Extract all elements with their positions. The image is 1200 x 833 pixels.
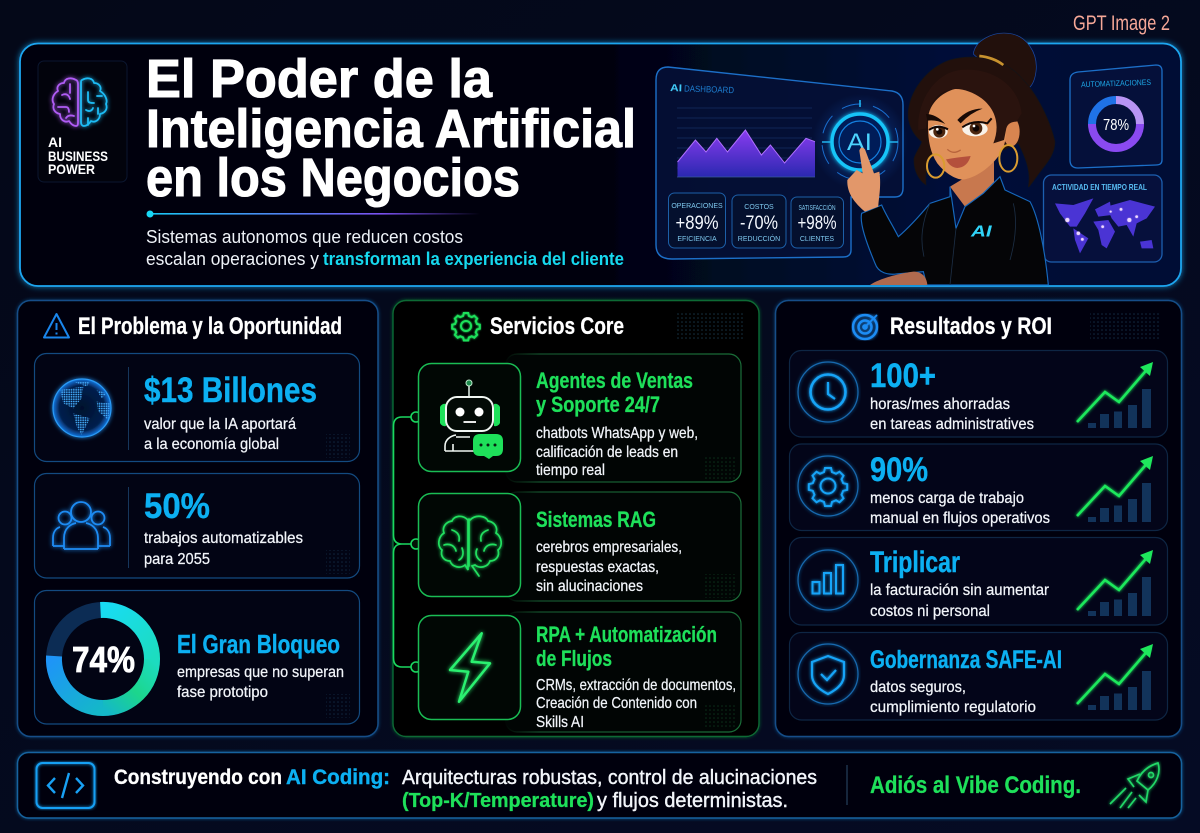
chart: growth arrow xyxy=(1077,362,1153,428)
text: Sistemas RAG xyxy=(536,507,656,532)
face xyxy=(928,88,1006,180)
donut 78% xyxy=(1092,100,1140,148)
text: Agentes de Ventas xyxy=(536,368,693,393)
text: a la economía global xyxy=(144,436,279,453)
text: cerebros empresariales, xyxy=(536,539,682,556)
jacket logo: AI xyxy=(970,224,992,241)
subtitle: escalan operaciones y xyxy=(146,249,319,269)
closing statement: Adiós al Vibe Coding. xyxy=(870,772,1081,799)
dashboard heading: DASHBOARD xyxy=(684,83,735,95)
text xyxy=(870,357,1034,433)
icon: people xyxy=(53,502,110,549)
icon: brain xyxy=(439,516,501,576)
dashboard heading xyxy=(670,83,735,96)
stat: costos: COSTOS xyxy=(744,204,774,211)
icon: AI circle: AI xyxy=(847,129,872,156)
text xyxy=(536,368,698,479)
dashboard: automatizaciones: 78% xyxy=(1103,117,1129,134)
jacket zip and seams xyxy=(922,203,1016,285)
text: empresas que no superan xyxy=(177,664,344,681)
text: manual en flujos operativos xyxy=(870,510,1050,527)
stat: costos: REDUCCIÓN xyxy=(738,234,780,243)
panel: header xyxy=(20,33,1181,286)
dashboard: actividad en tiempo real xyxy=(1044,175,1162,262)
icon: lightning bolt xyxy=(450,633,490,702)
text: la facturación sin aumentar xyxy=(870,582,1050,599)
card: 50% xyxy=(34,474,360,578)
footer heading: AI Coding: xyxy=(286,766,390,789)
panel: resultados y ROI xyxy=(776,300,1182,736)
text: fase prototipo xyxy=(177,684,268,701)
title: en los Negocios xyxy=(146,148,520,208)
text: cumplimiento regulatorio xyxy=(870,699,1036,716)
icon: warning xyxy=(44,314,69,338)
title: El Poder de la xyxy=(146,49,493,109)
earrings xyxy=(927,145,1017,178)
icon: AI circle xyxy=(812,94,908,190)
text: de Flujos xyxy=(536,646,612,671)
text: Triplicar xyxy=(870,546,960,579)
text: costos ni personal xyxy=(870,603,990,620)
panel: servicios core xyxy=(393,300,759,736)
panel: el problema y la oportunidad xyxy=(18,300,378,736)
text xyxy=(144,371,317,453)
hair tie xyxy=(979,56,1003,65)
stat: operaciones xyxy=(668,193,726,248)
world map xyxy=(1055,198,1155,253)
icon: gear xyxy=(798,456,858,516)
title underline xyxy=(146,210,480,218)
icon: robot xyxy=(440,380,503,459)
text: menos carga de trabajo xyxy=(870,490,1024,507)
jacket xyxy=(861,177,1048,285)
text: 90% xyxy=(870,451,928,489)
logo: AI Business Power xyxy=(38,61,127,182)
donut chart: 74% xyxy=(54,610,152,708)
stat: costos xyxy=(732,195,786,248)
text: chatbots WhatsApp y web, xyxy=(536,425,698,442)
dashboard: automatizaciones xyxy=(1070,65,1162,168)
text: en tareas administratives xyxy=(870,416,1034,433)
footer banner xyxy=(18,752,1182,818)
footer heading: Construyendo con xyxy=(114,766,282,789)
text: RPA + Automatización xyxy=(536,622,717,647)
text: 50% xyxy=(144,487,210,526)
text: para 2055 xyxy=(144,551,210,568)
dashboard heading: AI xyxy=(670,83,683,94)
subtitle: Sistemas autonomos que reducen costos xyxy=(146,227,463,247)
text: sin alucinaciones xyxy=(536,578,643,595)
hair: bun xyxy=(973,33,1036,91)
text xyxy=(870,451,1050,527)
icon: gear xyxy=(452,313,480,340)
footer description: (Top-K/Temperature) xyxy=(402,790,594,812)
title: Inteligencia Artificial xyxy=(146,99,636,159)
stat: satisfacción: SATISFACCIÓN xyxy=(798,203,836,212)
text: El Gran Bloqueo xyxy=(177,629,340,659)
footer description: Arquitecturas robustas, control de alucinaciones xyxy=(402,767,817,789)
card: sistemas RAG xyxy=(418,492,741,601)
icon: code xyxy=(36,763,94,808)
text: horas/mes ahorradas xyxy=(870,396,1010,413)
card: triplicar xyxy=(790,538,1168,625)
text: Creación de Contenido con xyxy=(536,695,697,712)
footer heading xyxy=(114,766,390,789)
chart: growth arrow xyxy=(1077,456,1153,522)
footer description xyxy=(402,767,817,812)
text xyxy=(870,546,1050,620)
icon: shield xyxy=(798,644,858,704)
stat: operaciones: +89% xyxy=(676,213,719,234)
dashboard: main screen xyxy=(656,67,903,259)
footer description: y flujos deterministas. xyxy=(597,790,788,812)
text: trabajos automatizables xyxy=(144,530,303,547)
text xyxy=(536,622,736,731)
dashboard: automatizaciones: AUTOMATIZACIONES xyxy=(1081,78,1151,89)
text: datos seguros, xyxy=(870,679,966,696)
card: agentes de ventas xyxy=(418,354,741,482)
title xyxy=(146,49,636,208)
text: tiempo real xyxy=(536,462,605,479)
logo text: AI xyxy=(48,134,62,150)
text: respuestas exactas, xyxy=(536,559,659,576)
ear xyxy=(1003,117,1020,146)
hand on desk xyxy=(870,272,927,285)
subtitle: transforman la experiencia del cliente xyxy=(323,249,624,269)
card: 90% xyxy=(790,444,1168,530)
chart: growth arrow xyxy=(1077,550,1153,616)
text: $13 Billones xyxy=(144,371,317,410)
icon: bars xyxy=(798,550,858,610)
logo text: BUSINESS xyxy=(48,148,108,164)
card: 74% xyxy=(34,590,360,724)
chart: growth arrow xyxy=(1077,644,1153,710)
watermark: GPT Image 2: GPT Image 2 xyxy=(1073,12,1170,35)
hair: fringe xyxy=(918,70,1022,143)
text: Gobernanza SAFE-AI xyxy=(870,646,1062,674)
stat: operaciones: OPERACIONES xyxy=(671,203,723,210)
hair: back and ponytail xyxy=(908,57,1055,187)
text: valor que la IA aportará xyxy=(144,416,296,433)
icon: rocket xyxy=(1110,763,1159,808)
illustration: woman with AI jacket xyxy=(847,33,1055,285)
stat: operaciones: EFICIENCIA xyxy=(677,236,717,243)
text xyxy=(870,646,1062,716)
heading: El Problema y la Oportunidad xyxy=(78,313,342,340)
connector lines xyxy=(394,412,421,672)
card: RPA + automatización xyxy=(418,612,741,732)
stat: satisfacción xyxy=(791,197,844,248)
subtitle xyxy=(146,227,624,269)
card: 100+ xyxy=(790,350,1168,437)
icon: target xyxy=(853,315,877,339)
text: Skills AI xyxy=(536,714,584,731)
logo text: POWER xyxy=(48,161,95,177)
text xyxy=(144,487,303,568)
text xyxy=(177,629,344,701)
text: calificación de leads en xyxy=(536,444,678,461)
hand pointing xyxy=(847,147,880,212)
card: $13 billones xyxy=(34,354,360,462)
icon: globe xyxy=(53,379,111,437)
text: 100+ xyxy=(870,357,936,395)
card: gobernanza SAFE-AI xyxy=(790,632,1168,720)
text: CRMs, extracción de documentos, xyxy=(536,677,736,694)
area chart xyxy=(677,108,815,177)
eyes and brows xyxy=(926,109,992,138)
icon: brain xyxy=(53,78,107,126)
donut value: 74% xyxy=(72,639,135,680)
dashboard: actividad en tiempo real: ACTIVIDAD EN TIEMPO REAL xyxy=(1052,182,1147,192)
stat: satisfacción: CLIENTES xyxy=(800,236,834,243)
logo text xyxy=(48,134,108,177)
stat: costos: -70% xyxy=(740,213,778,234)
text xyxy=(536,507,682,595)
heading: Resultados y ROI xyxy=(890,313,1052,340)
heading: Servicios Core xyxy=(490,313,624,340)
stat: satisfacción: +98% xyxy=(798,213,837,234)
neck xyxy=(950,162,994,207)
icon: clock xyxy=(798,362,858,422)
nose and lips xyxy=(946,149,971,168)
text: y Soporte 24/7 xyxy=(536,392,660,417)
